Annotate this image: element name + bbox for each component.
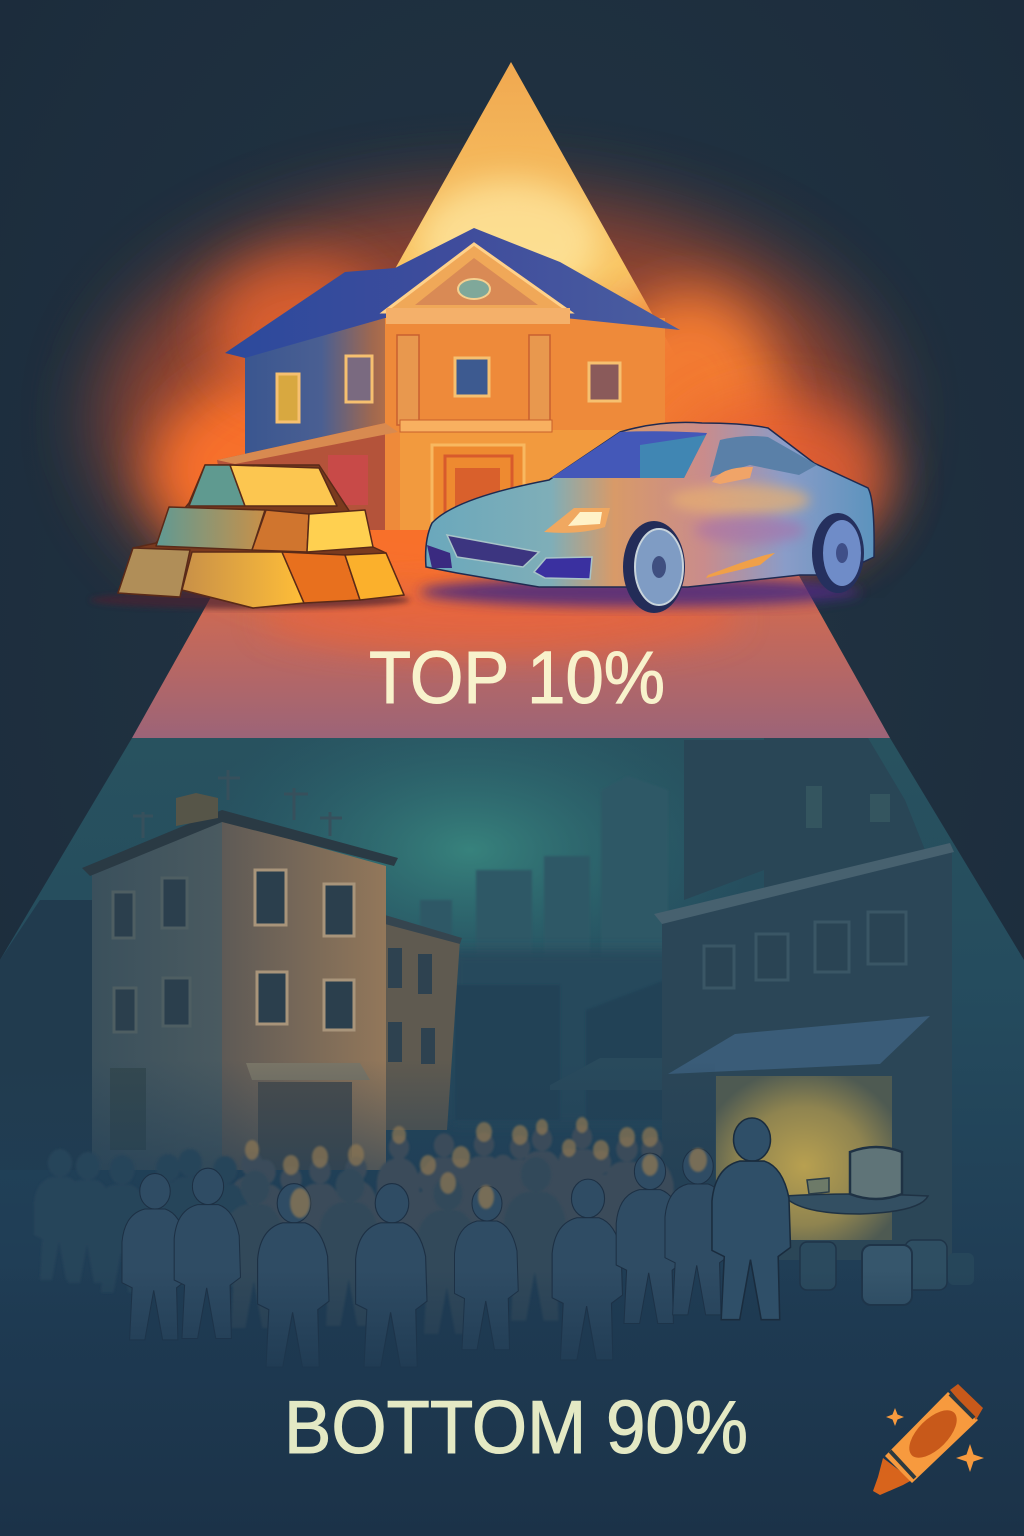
side window bbox=[710, 436, 817, 477]
antennas bbox=[133, 770, 342, 838]
cup bbox=[807, 1178, 829, 1194]
counter bbox=[784, 1194, 928, 1214]
hazy midground bbox=[450, 950, 680, 1125]
icon: gold bars bbox=[118, 465, 404, 608]
leg fade bbox=[0, 1270, 1024, 1380]
ground shadow bbox=[90, 577, 860, 609]
icon: sports car bbox=[426, 422, 874, 613]
main facade bbox=[385, 318, 665, 530]
middle rows bbox=[224, 1157, 567, 1334]
columns bbox=[397, 335, 550, 425]
panel: bottom 90% scene bbox=[0, 690, 1024, 1536]
icon: apartment building bbox=[82, 770, 462, 1170]
crayon cap bbox=[950, 1384, 983, 1420]
main facade bbox=[92, 820, 222, 1170]
roof bbox=[82, 810, 398, 876]
fog lights bbox=[427, 545, 452, 568]
lower left wing bbox=[217, 423, 385, 530]
icon: crayon logo bbox=[873, 1384, 984, 1495]
windows bbox=[113, 870, 354, 1032]
side wing bbox=[385, 918, 460, 1130]
lit interior bbox=[716, 1076, 892, 1240]
crayon body bbox=[885, 1392, 978, 1483]
heading: bottom 90%: BOTTOM 90% bbox=[284, 1385, 748, 1469]
crayon tip bbox=[873, 1458, 912, 1495]
entablature bbox=[386, 308, 570, 324]
chimney bbox=[176, 793, 218, 826]
sparkles bbox=[886, 1408, 984, 1472]
side rows bbox=[34, 1149, 250, 1293]
standing figure at stall bbox=[712, 1118, 790, 1320]
warm glow over scene bbox=[150, 260, 890, 655]
crayon label bbox=[901, 1402, 965, 1466]
awning bbox=[668, 1016, 930, 1074]
balcony band bbox=[400, 420, 552, 432]
crowd bbox=[0, 1060, 1024, 1380]
warm heads front bbox=[290, 1148, 707, 1218]
rear wheel bbox=[812, 513, 864, 593]
bright pyramid highlight bbox=[420, 180, 600, 300]
front rows bbox=[122, 1148, 730, 1367]
grille bbox=[447, 535, 539, 567]
fade behind crowd bbox=[0, 1060, 715, 1240]
crayon bands bbox=[890, 1394, 974, 1478]
top row bbox=[189, 465, 245, 506]
roof bbox=[225, 228, 680, 358]
pediment bbox=[384, 244, 570, 312]
windows bbox=[277, 356, 620, 422]
side wing bbox=[245, 315, 385, 530]
mirror bbox=[712, 467, 753, 484]
lower trapezoid bbox=[0, 738, 1024, 1536]
bottom row bbox=[118, 548, 190, 597]
teal sky glow bbox=[190, 690, 750, 1010]
back rows bbox=[229, 1125, 674, 1284]
pot bbox=[850, 1147, 902, 1199]
icon: lit stall building bbox=[654, 843, 974, 1305]
barrels bbox=[800, 1242, 836, 1290]
distant skyline bbox=[420, 776, 668, 980]
middle row bbox=[156, 507, 265, 550]
midground blocks bbox=[455, 980, 665, 1120]
outer glow behind pyramid bbox=[100, 195, 880, 645]
pile backing bbox=[118, 465, 404, 608]
body bbox=[426, 422, 874, 587]
side highlight bbox=[706, 553, 775, 578]
windshield bbox=[551, 431, 707, 478]
tower windows bbox=[806, 786, 890, 828]
headlight bbox=[544, 508, 610, 533]
warm heads bbox=[245, 1117, 658, 1194]
front wheel bbox=[623, 521, 685, 613]
panel: top 10% pyramid bbox=[132, 62, 890, 738]
shopfront bbox=[246, 1063, 370, 1080]
entrance bbox=[432, 445, 524, 530]
tall dark towers bbox=[684, 738, 925, 900]
icon: mansion bbox=[217, 228, 680, 530]
left faint building bbox=[0, 900, 92, 1170]
heading: top 10%: TOP 10% bbox=[369, 636, 665, 719]
